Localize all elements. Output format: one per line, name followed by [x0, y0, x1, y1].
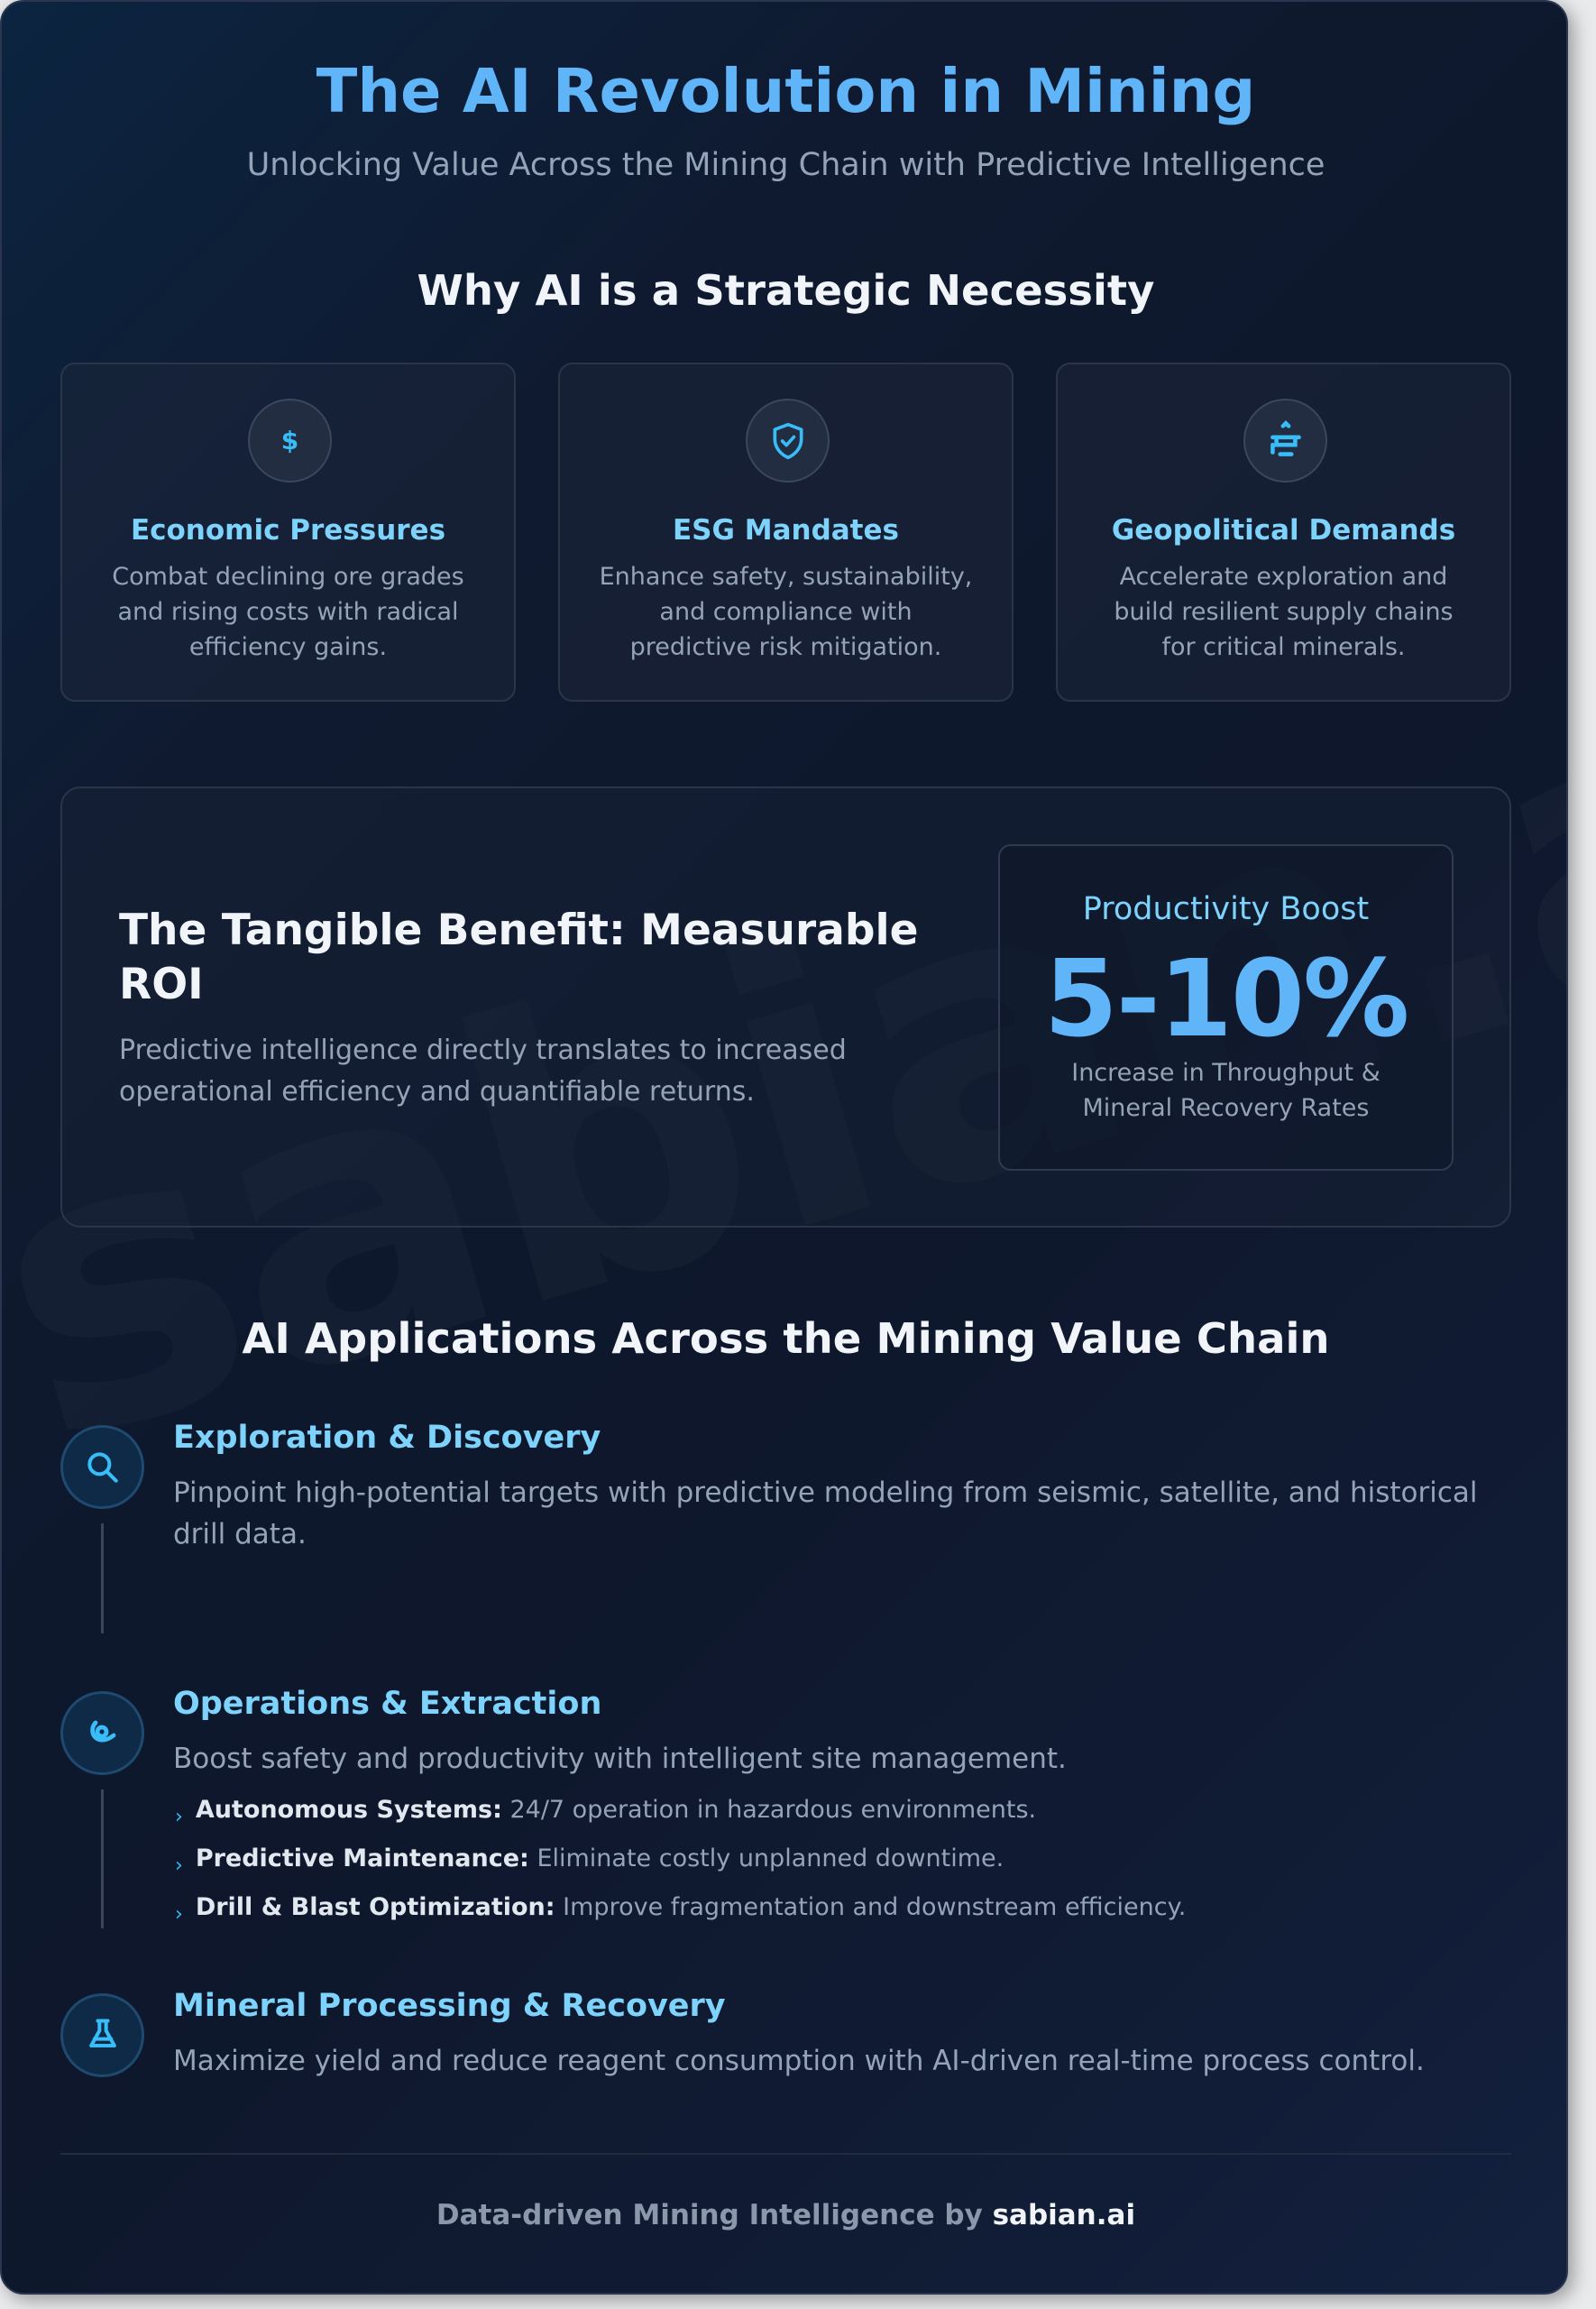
icon: search — [60, 1425, 144, 1509]
card text: and rising costs with radical — [117, 598, 459, 626]
icon: cart — [1243, 399, 1327, 483]
panel: ROI — [60, 787, 1511, 1228]
item text: Maximize yield and reduce reagent consumption with AI-driven real-time process control. — [173, 2045, 1425, 2077]
ROI heading: The Tangible Benefit: Measurable ROI — [119, 906, 919, 1009]
icon: dollar — [248, 399, 332, 483]
icon: drill — [60, 1691, 144, 1775]
bullet: autonomous: › Autonomous Systems: 24/7 operation in hazardous environments. — [175, 1796, 1036, 1828]
item: exploration — [60, 1420, 1478, 1633]
item: operations — [60, 1686, 1186, 1928]
icon: flask — [60, 1993, 144, 2077]
stat caption: Mineral Recovery Rates — [1082, 1094, 1369, 1122]
card text: build resilient supply chains — [1114, 598, 1454, 626]
stat box — [998, 844, 1454, 1171]
ROI text: Predictive intelligence directly translates to increased operational efficiency and quantifiable returns. — [119, 1035, 847, 1108]
icon: shield — [746, 399, 830, 483]
item heading: Operations & Extraction — [173, 1686, 601, 1722]
card text: and compliance with — [659, 598, 913, 626]
card text: for critical minerals. — [1161, 633, 1406, 661]
bullet: drill blast: › Drill & Blast Optimization: Improve fragmentation and downstream efficiency. — [175, 1893, 1186, 1926]
card text — [600, 563, 972, 661]
item text: Boost safety and productivity with intelligent site management. — [173, 1743, 1067, 1775]
card text: efficiency gains. — [189, 633, 387, 661]
item text: Pinpoint high-potential targets with predictive modeling from seismic, satellite, and historical drill data. — [173, 1476, 1478, 1550]
panel: esg mandates — [558, 363, 1014, 702]
title: The AI Revolution in Mining — [316, 56, 1255, 126]
bullet: maintenance: › Predictive Maintenance: Eliminate costly unplanned downtime. — [175, 1844, 1004, 1877]
stat caption — [1071, 1059, 1380, 1122]
subtitle: Unlocking Value Across the Mining Chain with Predictive Intelligence — [247, 147, 1325, 183]
icon: dollar: $ — [281, 426, 298, 455]
stat caption: Increase in Throughput & — [1071, 1059, 1380, 1087]
footer: Data-driven Mining Intelligence by sabian.ai — [436, 2199, 1135, 2231]
card text — [112, 563, 464, 661]
panel: economic pressures — [60, 363, 516, 702]
card text — [1114, 563, 1454, 661]
card heading: Geopolitical Demands — [1112, 514, 1455, 547]
card text: Combat declining ore grades — [112, 563, 464, 591]
item heading: Exploration & Discovery — [173, 1420, 601, 1456]
stat label: Productivity Boost — [1083, 891, 1369, 927]
card text: predictive risk mitigation. — [630, 633, 941, 661]
panel: geopolitical demands — [1056, 363, 1511, 702]
card heading: Economic Pressures — [131, 514, 445, 547]
heading: applications: AI Applications Across the Mining Value Chain — [242, 1314, 1330, 1363]
card text: Enhance safety, sustainability, — [600, 563, 972, 591]
card text: Accelerate exploration and — [1120, 563, 1447, 591]
heading: strategic necessity: Why AI is a Strategic Necessity — [417, 266, 1154, 315]
item heading: Mineral Processing & Recovery — [173, 1988, 726, 2024]
card heading: ESG Mandates — [673, 514, 899, 547]
stat number: 5-10% — [1044, 936, 1408, 1061]
item: processing — [60, 1988, 1425, 2077]
